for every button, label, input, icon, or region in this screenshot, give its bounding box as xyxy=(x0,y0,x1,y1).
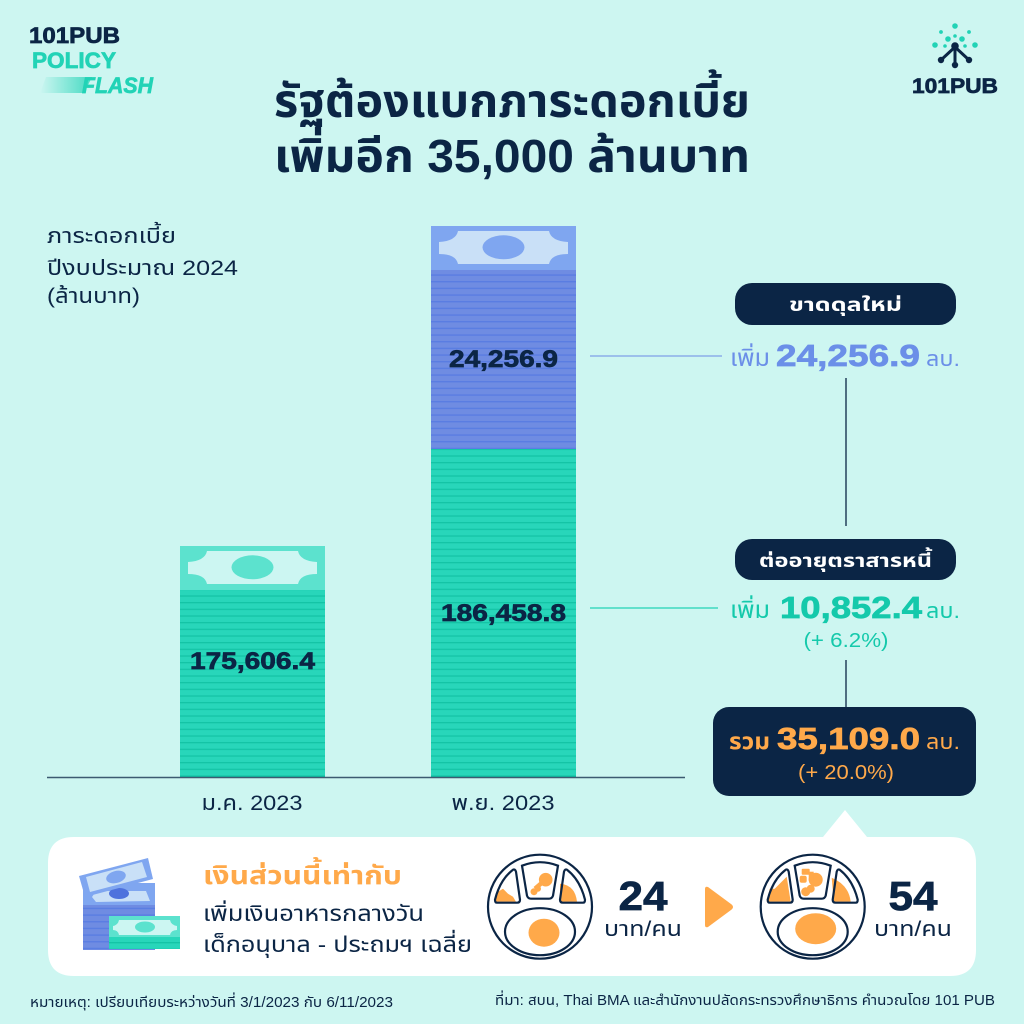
callout: debt rollover: ลบ. xyxy=(926,600,960,623)
text: lunch money description: เพิ่มเงินอาหารกลางวัน xyxy=(203,899,424,926)
title: เพิ่มอีก 35,000 ล้านบาท xyxy=(274,127,750,182)
callout: total: ลบ. xyxy=(926,731,960,754)
chart subtitle xyxy=(47,221,238,308)
callout: debt rollover: (+ 6.2%) xyxy=(804,630,888,652)
stat: 54 baht per person: บาท/คน xyxy=(874,918,952,941)
bar: January 2023: 175,606.4 xyxy=(190,648,316,675)
callout: debt rollover xyxy=(730,539,960,652)
panel: school lunch comparison xyxy=(48,810,976,976)
text: lunch money heading: เงินส่วนนี้เท่ากับ xyxy=(203,857,402,890)
logo: 101PUB Policy Flash xyxy=(29,23,154,98)
chart subtitle: (ล้านบาท) xyxy=(47,284,140,308)
callout: total: (+ 20.0%) xyxy=(798,762,894,784)
source: ที่มา: สบน, Thai BMA และสำนักงานปลัดกระทรวงศึกษาธิการ คำนวณโดย 101 PUB xyxy=(495,990,995,1009)
callout: debt rollover: ต่ออายุตราสารหนี้ xyxy=(759,547,933,572)
logo: 101PUB Policy Flash: POLICY xyxy=(32,48,116,73)
callout: debt rollover: 10,852.4 xyxy=(780,590,923,625)
icon: lunch tray 24 baht xyxy=(488,855,592,959)
text: lunch money description xyxy=(203,899,472,958)
axis label: January 2023: ม.ค. 2023 xyxy=(202,792,302,815)
stat: 24 baht per person: 24 xyxy=(618,873,668,919)
callout: total xyxy=(713,707,976,796)
callout: debt rollover: เพิ่ม xyxy=(730,594,770,624)
chart subtitle: ภาระดอกเบี้ย xyxy=(47,221,176,248)
callout: new deficit: เพิ่ม xyxy=(730,342,770,372)
title: รัฐต้องแบกภาระดอกเบี้ย xyxy=(274,69,750,127)
stat: 54 baht per person: 54 xyxy=(888,873,938,919)
callout: total: 35,109.0 xyxy=(777,721,920,756)
footnote: หมายเหตุ: เปรียบเทียบระหว่างวันที่ 3/1/2023 กับ 6/11/2023 xyxy=(30,992,393,1011)
logo: 101PUB network mark xyxy=(912,23,998,98)
bar: January 2023 xyxy=(180,546,325,777)
text: lunch money description: เด็กอนุบาล - ประถมฯ เฉลี่ย xyxy=(203,929,472,958)
logo: 101PUB Policy Flash: 101PUB xyxy=(29,23,120,48)
icon: money stacks xyxy=(79,858,180,950)
bar: November 2023: 186,458.8 xyxy=(441,600,566,627)
axis label: November 2023: พ.ย. 2023 xyxy=(452,792,554,815)
stat: 24 baht per person: บาท/คน xyxy=(604,918,682,941)
callout: new deficit: 24,256.9 xyxy=(776,338,920,373)
callout: new deficit: ลบ. xyxy=(926,348,960,371)
stat: 54 baht per person xyxy=(874,873,952,941)
bar chart xyxy=(47,226,685,815)
callout: total: รวม xyxy=(729,728,770,754)
bar: November 2023: 24,256.9 xyxy=(449,346,558,373)
chart subtitle: ปีงบประมาณ 2024 xyxy=(47,257,238,280)
logo: 101PUB network mark: 101PUB xyxy=(912,75,998,98)
stat: 24 baht per person xyxy=(604,873,682,941)
callout: new deficit: ขาดดุลใหม่ xyxy=(789,294,902,316)
bar: November 2023 xyxy=(431,226,576,777)
title xyxy=(274,69,750,182)
arrow xyxy=(705,887,733,927)
icon: lunch tray 54 baht xyxy=(761,855,865,959)
callout: new deficit xyxy=(730,283,960,373)
logo: 101PUB Policy Flash: FLASH xyxy=(82,73,154,98)
